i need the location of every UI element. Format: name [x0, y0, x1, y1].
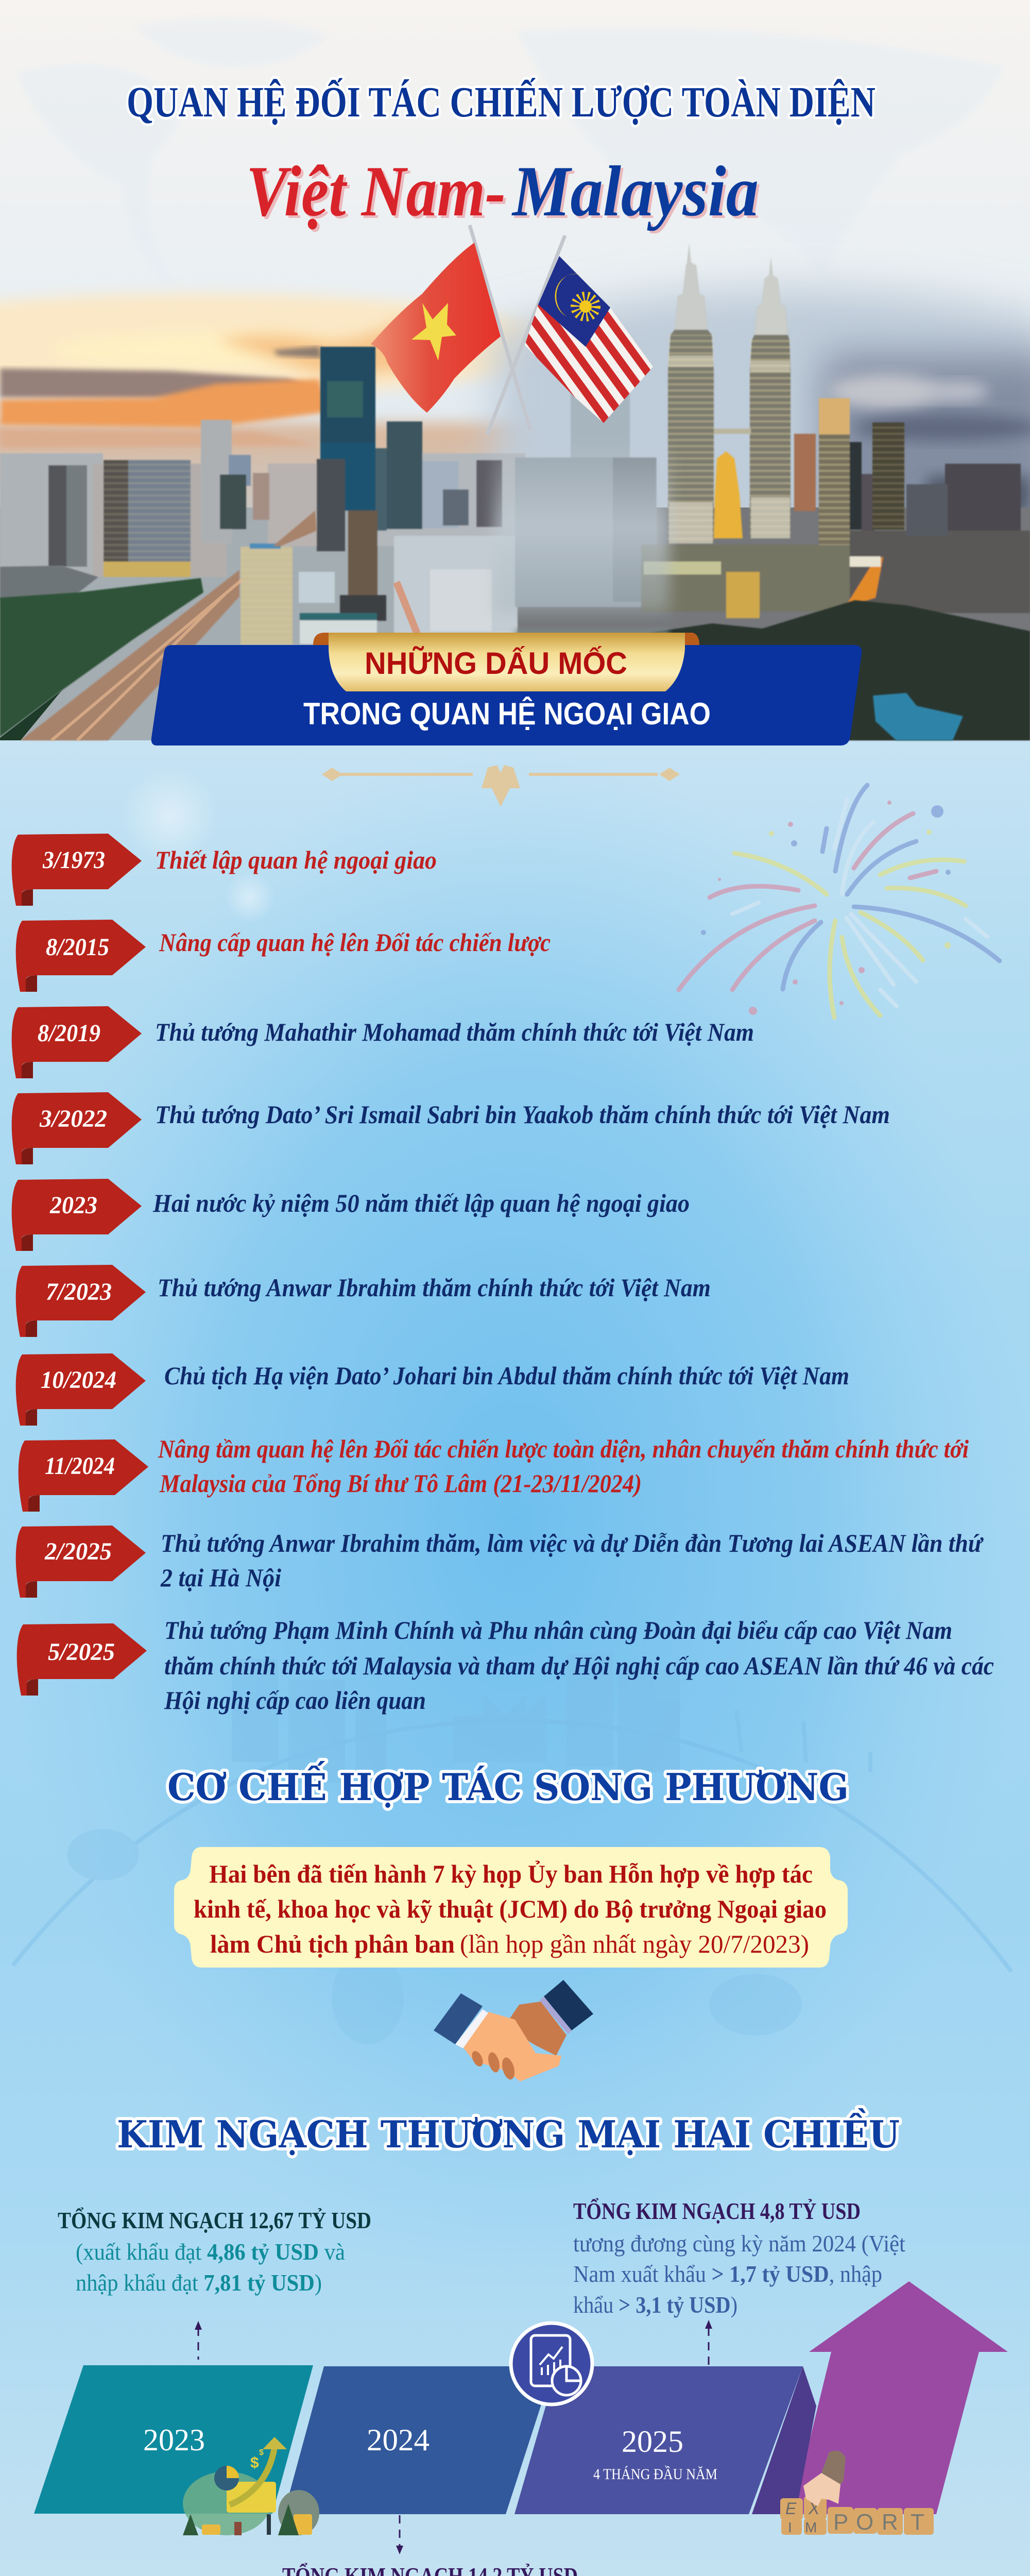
text: trade 2025: khẩu > 3,1 tỷ USD): [573, 2292, 737, 2318]
milestone 11/2024: [19, 1434, 969, 1512]
milestone 8/2019: 8/2019: [38, 1020, 100, 1047]
milestone 8/2019: [12, 1006, 754, 1078]
milestone 10/2024: Chủ tịch Hạ viện Dato’ Johari bin Abdul thăm chính thức tới Việt Nam: [164, 1361, 849, 1390]
ground: [0, 507, 1030, 740]
milestone 5/2025: 5/2025: [48, 1638, 115, 1666]
purple growth arrow: [792, 2281, 1008, 2514]
arrow: 2024 to text: [396, 2515, 403, 2554]
milestone 3/2022: 3/2022: [39, 1105, 107, 1132]
milestone 8/2015: 8/2015: [46, 934, 109, 961]
gold temple: [714, 451, 743, 538]
flag poles: [470, 225, 530, 430]
milestone 8/2015: [16, 920, 551, 992]
pool: [873, 693, 963, 740]
text: trade 2023: (xuất khẩu đạt 4,86 tỷ USD và: [76, 2239, 345, 2265]
text: trade 2023: [58, 2206, 371, 2296]
petronas tower left: [668, 244, 714, 544]
milestone 5/2025: Thủ tướng Phạm Minh Chính và Phu nhân cùng Đoàn đại biểu cấp cao Việt Nam: [164, 1616, 952, 1645]
illustration: export import blocks: E: [785, 2499, 797, 2518]
stadium: [0, 566, 98, 600]
milestone 3/1973: Thiết lập quan hệ ngoại giao: [155, 845, 437, 874]
green trees left: [0, 578, 203, 737]
crossed flags: [371, 225, 653, 434]
icon: report circle: [511, 2323, 592, 2404]
bar: 2025 fold: [752, 2366, 816, 2514]
ornament divider: [322, 765, 680, 807]
milestone 3/2022: [12, 1092, 890, 1164]
callout: JCM yellow box: làm Chủ tịch phân ban: [210, 1929, 455, 1958]
milestone 7/2023: 7/2023: [46, 1278, 112, 1306]
illustration: export import blocks: P: [833, 2510, 848, 2535]
milestone 7/2023: [16, 1265, 711, 1337]
text: trade 2025: TỔNG KIM NGẠCH 4,8 TỶ USD: [573, 2197, 861, 2224]
milestone 11/2024: 11/2024: [45, 1452, 115, 1480]
other towers: [794, 434, 816, 511]
bar: 2025: 4 THÁNG ĐẦU NĂM: [593, 2465, 717, 2483]
title line 2: Việt Nam-: [246, 151, 506, 231]
text: trade 2023: nhập khẩu đạt 7,81 tỷ USD): [76, 2269, 322, 2296]
milestone 11/2024: Malaysia của Tổng Bí thư Tô Lâm (21-23/11/2024): [159, 1469, 642, 1498]
arrow: 2025 to text: [705, 2320, 712, 2365]
heading text: NHỮNG DẤU MỐC: [365, 646, 627, 681]
illustration: export import blocks: M: [805, 2519, 817, 2535]
hero: city skyline photo: [0, 0, 1030, 740]
hanoi buildings: [0, 347, 525, 645]
illustration: finance growth: $: [250, 2454, 259, 2471]
world map silhouette: [15, 18, 1004, 289]
hero foliage strip under banner: [515, 629, 670, 649]
milestone 3/1973: [12, 834, 437, 906]
bar: 2024: 2024: [367, 2423, 430, 2457]
bar: 2024: [284, 2366, 554, 2514]
podium: [641, 545, 857, 612]
sunset sky left: [0, 294, 566, 536]
callout: JCM yellow box: kinh tế, khoa học và kỹ thuật (JCM) do Bộ trưởng Ngoại giao: [194, 1894, 827, 1923]
text: trade 2023: TỔNG KIM NGẠCH 12,67 TỶ USD: [58, 2206, 371, 2233]
icon: flag of Vietnam: [371, 243, 501, 413]
gold folds: [313, 633, 699, 645]
milestone 8/2015: Nâng cấp quan hệ lên Đối tác chiến lược: [159, 928, 551, 957]
arrow: 2023 to text: [195, 2321, 202, 2360]
banner: milestones heading: [151, 633, 862, 745]
illustration: export import blocks: R: [882, 2510, 898, 2535]
illustration: export import blocks: [780, 2496, 934, 2535]
milestone 10/2024: 10/2024: [41, 1366, 116, 1394]
bar: 2023: [34, 2365, 313, 2514]
icon: hand picking block: [803, 2451, 846, 2506]
illustration: finance growth: $: [259, 2448, 264, 2457]
cloudy sky right: [494, 289, 1030, 546]
milestone 2023: [12, 1179, 690, 1251]
heading: two-way trade: KIM NGẠCH THƯƠNG MẠI HAI CHIỀU: [117, 2108, 900, 2156]
milestone 8/2019: Thủ tướng Mahathir Mohamad thăm chính thức tới Việt Nam: [155, 1018, 754, 1046]
bar: 2023: 2023: [143, 2423, 205, 2457]
text: trade 2025: Nam xuất khẩu > 1,7 tỷ USD, nhập: [573, 2261, 882, 2287]
heading: bilateral mechanism: CƠ CHẾ HỢP TÁC SONG PHƯƠNG: [167, 1760, 849, 1809]
illustration: export import blocks: X: [808, 2499, 820, 2518]
milestone 5/2025: Hội nghị cấp cao liên quan: [164, 1686, 426, 1715]
icon: handshake: [434, 1980, 593, 2081]
text: trade 2025: [573, 2197, 905, 2318]
title line 2: Malaysia: [511, 151, 759, 231]
illustration: export import blocks: O: [856, 2510, 873, 2535]
skybridge: [714, 429, 751, 434]
milestone 2/2025: [16, 1526, 984, 1598]
dark trees right: [608, 600, 1030, 740]
sky: [0, 0, 1030, 515]
title line 2: [246, 151, 759, 231]
bar: 2025: 2025: [622, 2425, 683, 2459]
sub heading text: TRONG QUAN HỆ NGOẠI GIAO: [303, 697, 711, 731]
bar: 2025: [514, 2366, 803, 2514]
kuala lumpur hazy buildings: [515, 244, 1030, 618]
callout: JCM yellow box: Hai bên đã tiến hành 7 kỳ họp Ủy ban Hỗn hợp về hợp tác: [209, 1859, 813, 1888]
road: [21, 511, 317, 740]
icon: flag of Malaysia: [525, 256, 653, 423]
gold tab: [329, 633, 685, 691]
milestone 2023: Hai nước kỷ niệm 50 năm thiết lập quan hệ ngoại giao: [152, 1189, 690, 1217]
milestone 10/2024: [16, 1353, 849, 1426]
timeline: milestones: [12, 834, 994, 1715]
illustration: finance growth: [183, 2437, 319, 2535]
milestone 2023: 2023: [49, 1192, 97, 1219]
banner blue panel: [151, 645, 862, 745]
petronas tower right: [750, 258, 791, 538]
milestone 3/2022: Thủ tướng Dato’ Sri Ismail Sabri bin Yaakob thăm chính thức tới Việt Nam: [155, 1100, 890, 1129]
milestone 2/2025: 2/2025: [44, 1538, 112, 1565]
milestone 3/1973: 3/1973: [42, 846, 105, 874]
text: trade 2025: tương đương cùng kỳ năm 2024 (Việt: [573, 2230, 905, 2257]
callout: JCM yellow box: (lần họp gần nhất ngày 20/7/2023): [460, 1929, 809, 1958]
callout: JCM yellow box: [174, 1847, 848, 1968]
decorative fireworks: [679, 785, 1000, 1018]
illustration: export import blocks: T: [911, 2510, 924, 2535]
milestone 5/2025: [17, 1616, 994, 1715]
faint city background: [13, 1654, 1011, 2044]
illustration: export import blocks: I: [788, 2519, 792, 2535]
milestone 2/2025: 2 tại Hà Nội: [160, 1563, 281, 1592]
milestone 7/2023: Thủ tướng Anwar Ibrahim thăm chính thức tới Việt Nam: [158, 1273, 711, 1302]
hazy overlay centre: [494, 443, 670, 613]
